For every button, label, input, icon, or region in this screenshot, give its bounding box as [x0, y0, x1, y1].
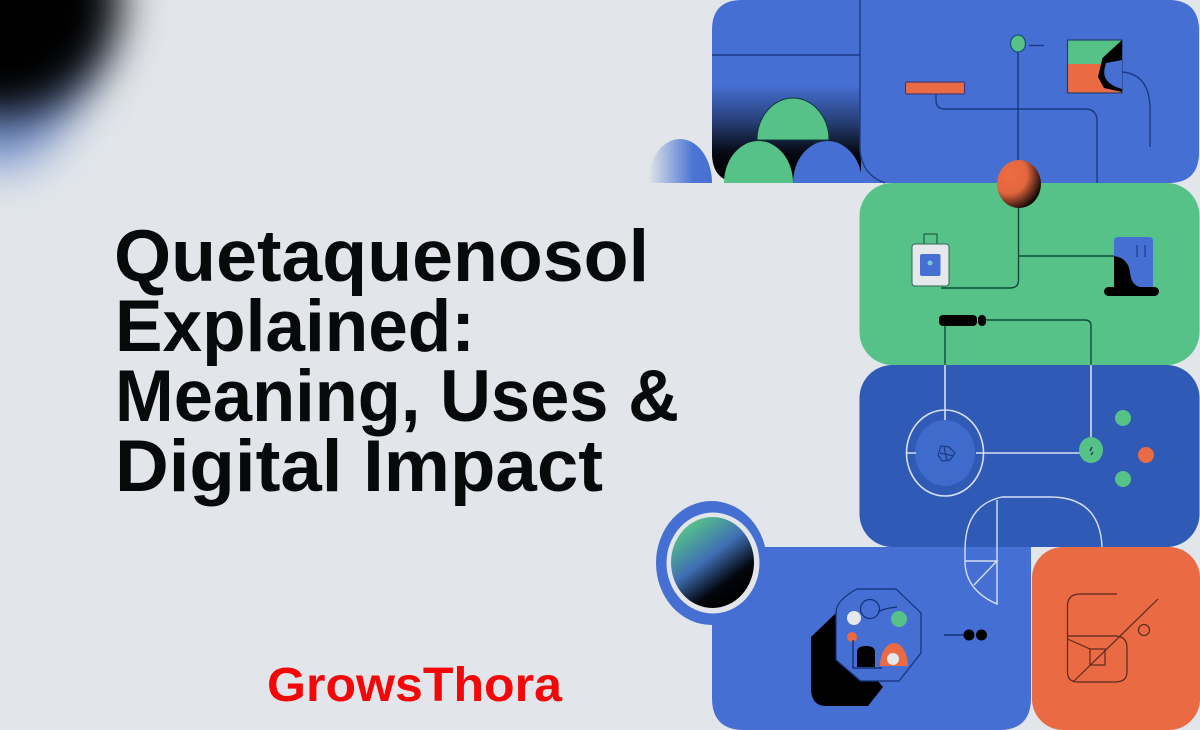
title: Quetaquenosol [114, 216, 649, 297]
panel right part overlay [860, 0, 1199, 183]
title: Digital Impact [115, 426, 603, 507]
icon: black bar [939, 315, 986, 326]
octagon icon [811, 589, 921, 706]
panel: dark blue [860, 365, 1200, 547]
title: Explained: [115, 286, 475, 367]
top green dome [757, 98, 829, 140]
dark gradient shade [712, 85, 861, 183]
icon: tag [912, 234, 949, 286]
panel: orange [1032, 547, 1200, 730]
blue dome [793, 141, 862, 183]
split square icon [1068, 40, 1150, 147]
panel: green [860, 183, 1200, 365]
corner blur: black and blue [0, 0, 120, 168]
green node [1079, 437, 1103, 463]
arch line drawing [965, 497, 1102, 604]
panel: top blue [648, 0, 1199, 183]
panel lines [712, 0, 885, 183]
left green dome [724, 141, 793, 183]
connector lines [941, 205, 1115, 288]
connector dots [944, 630, 987, 640]
faded dome [648, 139, 712, 183]
title: Meaning, Uses & [115, 356, 679, 437]
sphere [997, 160, 1041, 208]
ring dial [906, 365, 1091, 496]
green node and stem [1010, 35, 1044, 162]
title [114, 216, 679, 507]
panel: bottom blue [656, 501, 1031, 730]
icon: blue device [1104, 237, 1159, 296]
orb badge [656, 501, 767, 625]
orange bar with connector [906, 82, 1097, 183]
line icon [1068, 594, 1158, 682]
brand name: GrowsThora [267, 659, 562, 712]
dots [1115, 410, 1154, 487]
